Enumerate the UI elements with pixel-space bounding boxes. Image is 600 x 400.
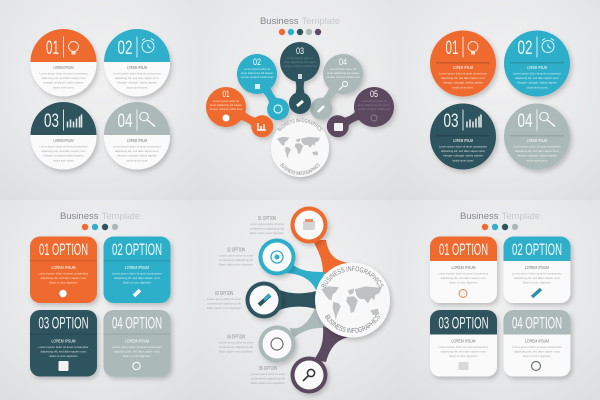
circle 02: Integer volutpat mattis sapien [517, 80, 557, 84]
petal body text: amet adipiscing elit sapien [241, 71, 273, 75]
option label 01: Etiam sapien nunc dignissim [250, 231, 284, 235]
circle 04: Integer volutpat mattis sapien [517, 154, 557, 158]
petal body text: semper volutpat mattis amet [326, 75, 360, 79]
card 04: Lorem ipsum dolor sit amet consectetur [512, 345, 562, 349]
card 04: 04 OPTION [512, 314, 562, 332]
circle 03 [30, 102, 96, 170]
card 02: adipiscing elit, sed diam sapien nunc [114, 276, 160, 280]
node 01 [290, 206, 328, 244]
connectors [275, 240, 349, 362]
circle 04: iaculis amet donec [126, 158, 148, 162]
card 04: 04 OPTION [112, 314, 162, 332]
option label 04: 04 OPTION [227, 334, 245, 340]
circle 03: Lorem ipsum dolor sit amet consectetur [439, 144, 487, 148]
card 03 [430, 310, 497, 376]
option label 05: Lorem ipsum dolor sit amet [251, 372, 285, 376]
card 02: Etiam ut nunc dignissim [123, 280, 151, 284]
circle 03: LOREM IPSUM [54, 138, 74, 143]
petal 04 [298, 46, 371, 129]
option label 04: Lorem ipsum dolor sit amet [219, 340, 253, 344]
circle 01: adipiscing elit, sed diam sapien nunc [42, 76, 86, 80]
option label 05: 05 OPTION [259, 366, 277, 372]
petal body text: amet adipiscing elit sapien [327, 71, 359, 75]
circle 03: LOREM IPSUM [453, 138, 473, 143]
card 01: adipiscing elit, sed diam sapien nunc [440, 276, 487, 280]
circle 03: adipiscing elit, sed diam sapien nunc [441, 149, 485, 153]
title: Business Template [60, 211, 140, 222]
card 02: 02 OPTION [512, 241, 562, 259]
circle 01: Integer volutpat mattis sapien [443, 80, 483, 84]
option label 01: 01 OPTION [258, 216, 276, 222]
petal 01 [199, 80, 281, 149]
card 04: LOREM IPSUM [125, 338, 149, 344]
circle 01: LOREM IPSUM [54, 65, 74, 70]
option label 02 [219, 248, 253, 266]
node 05 [290, 356, 328, 394]
circle 02: 02 [118, 38, 132, 59]
option label 03: Etiam sapien nunc dignissim [207, 306, 241, 310]
petal body text: Lorem ipsum dolor sit [330, 67, 356, 71]
card 02: Lorem ipsum dolor sit amet consectetur [112, 272, 162, 276]
card 03 [30, 310, 97, 376]
panel: coloured circles [430, 30, 570, 170]
circle 01: 01 [446, 38, 458, 59]
option label 01: consectetur adipiscing elit [250, 226, 284, 230]
circle 02: LOREM IPSUM [527, 65, 547, 70]
card 02: LOREM IPSUM [525, 265, 549, 270]
petal body text: Lorem ipsum dolor sit [213, 99, 239, 103]
petal 02 [230, 47, 301, 129]
circle 01 [430, 30, 496, 96]
petal labels: 04 [339, 57, 347, 67]
petal body text: amet adipiscing elit sapien [358, 103, 390, 107]
circle 04 [104, 102, 170, 170]
card 04 [504, 310, 570, 376]
circle 04: LOREM IPSUM [127, 138, 147, 143]
card 02 [104, 236, 170, 303]
circle 02 [504, 30, 570, 96]
colour dots [482, 224, 518, 230]
petal body text: amet adipiscing elit sapien [210, 103, 242, 107]
card 02: Lorem ipsum dolor sit amet consectetur [512, 272, 562, 276]
card 03: adipiscing elit, sed diam sapien nunc [40, 350, 87, 354]
circle 02: adipiscing elit, sed diam sapien nunc [115, 76, 159, 80]
circle 02: Lorem ipsum dolor sit amet consectetur [113, 72, 161, 76]
card 01: LOREM IPSUM [452, 265, 476, 270]
circle 01: 01 [46, 38, 59, 59]
node 04 [258, 326, 296, 362]
card 02: LOREM IPSUM [125, 265, 149, 270]
hub globe: BUSINESS INFOGRAPHICS [321, 266, 384, 288]
petal body text: amet adipiscing elit sapien [284, 60, 316, 64]
petal body text: semper volutpat mattis amet [284, 64, 317, 68]
option label 05 [251, 366, 285, 385]
petal icons [222, 74, 377, 131]
option label 03: 03 OPTION [215, 291, 233, 297]
circle 02: iaculis amet donec [126, 86, 148, 90]
circle 03: Integer volutpat mattis sapien [443, 154, 483, 158]
petal labels: 02 [253, 57, 261, 67]
circle 03: Integer volutpat mattis sapien [44, 154, 84, 158]
option label 01 [250, 216, 284, 235]
colour dots [279, 29, 321, 35]
card 02 [504, 236, 570, 303]
circle 03: Lorem ipsum dolor sit amet consectetur [40, 144, 88, 148]
circle 04: Integer volutpat mattis sapien [117, 154, 157, 158]
card 04 [104, 310, 170, 376]
title: Business Template [260, 16, 340, 27]
panel: hub and spoke options [207, 206, 394, 398]
petal body text [210, 56, 391, 111]
node 03 [246, 282, 282, 318]
hub globe [315, 262, 394, 342]
panel: five-petal business template [206, 16, 398, 182]
circle 01: iaculis amet donec [452, 86, 474, 90]
petal labels: 05 [370, 89, 378, 99]
card 04: Etiam ut nunc dignissim [523, 354, 551, 358]
option label 04: Etiam sapien nunc dignissim [219, 350, 253, 354]
card 01: Etiam ut nunc dignissim [50, 280, 78, 284]
card 04: adipiscing elit, sed diam sapien nunc [514, 350, 560, 354]
card 01: Lorem ipsum dolor sit amet consectetur [38, 272, 88, 276]
card 03: Lorem ipsum dolor sit amet consectetur [38, 345, 88, 349]
card 01 [30, 236, 97, 303]
card 02: adipiscing elit, sed diam sapien nunc [514, 276, 560, 280]
central globe badge: BUSINESS INFOGRAPHICS [280, 163, 320, 175]
petal body text: Lorem ipsum dolor sit [287, 56, 313, 60]
option label 05: Etiam sapien nunc dignissim [251, 381, 285, 385]
circle 03: iaculis amet donec [452, 158, 474, 162]
circle 01 [30, 29, 96, 96]
node 02 [258, 238, 296, 276]
circle 02: 02 [518, 38, 532, 59]
petal 05 [319, 80, 401, 149]
option label 02: Etiam sapien nunc dignissim [219, 262, 253, 266]
panel: white option cards [430, 211, 570, 376]
circle 04 [504, 104, 570, 170]
circle 03: iaculis amet donec [53, 158, 74, 162]
circle 04: adipiscing elit, sed diam sapien nunc [515, 149, 559, 153]
circle 03: 03 [44, 111, 59, 132]
card 01: Lorem ipsum dolor sit amet consectetur [438, 272, 488, 276]
card 04: Etiam ut nunc dignissim [123, 354, 151, 358]
card 03: adipiscing elit, sed diam sapien nunc [440, 350, 487, 354]
card 02: 02 OPTION [112, 241, 162, 259]
option label 05: consectetur adipiscing elit [251, 376, 285, 380]
card 01: 01 OPTION [439, 241, 488, 259]
petal 03 [280, 42, 320, 114]
card 03: Etiam ut nunc dignissim [450, 354, 478, 358]
petal body text: semper volutpat mattis amet [210, 107, 243, 111]
circle 01: Lorem ipsum dolor sit amet consectetur [439, 72, 487, 76]
option label 03 [207, 291, 241, 310]
title: Business Template [460, 211, 540, 222]
petal labels: 01 [222, 89, 230, 99]
circle 02 [104, 29, 170, 96]
circle 04: Lorem ipsum dolor sit amet consectetur [513, 144, 561, 148]
card 04: adipiscing elit, sed diam sapien nunc [114, 350, 160, 354]
panel: coloured option cards [30, 211, 170, 376]
panel: white circles with coloured caps [30, 29, 170, 170]
card 01: LOREM IPSUM [52, 265, 76, 270]
card 01: adipiscing elit, sed diam sapien nunc [40, 276, 87, 280]
card 01 [430, 236, 497, 303]
circle 01: adipiscing elit, sed diam sapien nunc [441, 76, 485, 80]
card 03: Lorem ipsum dolor sit amet consectetur [438, 345, 488, 349]
circle 04: Lorem ipsum dolor sit amet consectetur [113, 144, 161, 148]
circle 03: adipiscing elit, sed diam sapien nunc [42, 149, 86, 153]
petal body text: semper volutpat mattis amet [240, 75, 274, 79]
circle 04: LOREM IPSUM [527, 138, 547, 143]
card 03: 03 OPTION [38, 314, 88, 332]
hub globe: BUSINESS INFOGRAPHICS [324, 314, 380, 333]
circle 03: 03 [444, 111, 458, 132]
circle 02: Integer volutpat mattis sapien [117, 80, 157, 84]
circle 01: Integer volutpat mattis sapien [44, 80, 84, 84]
circle 04: iaculis amet donec [526, 158, 548, 162]
card 03: LOREM IPSUM [452, 338, 476, 344]
option label 02: 02 OPTION [227, 248, 245, 254]
option label 03: consectetur adipiscing elit [207, 302, 241, 306]
circle 02: LOREM IPSUM [127, 65, 147, 70]
circle 04: 04 [118, 111, 133, 132]
central globe badge: BUSINESS INFOGRAPHICS [278, 118, 322, 132]
option label 04: consectetur adipiscing elit [219, 345, 253, 349]
option label 03: Lorem ipsum dolor sit amet [207, 297, 241, 301]
petal body text: Lorem ipsum dolor sit [361, 99, 387, 103]
card 02: Etiam ut nunc dignissim [523, 280, 551, 284]
colour dots [82, 224, 118, 230]
card 04: Lorem ipsum dolor sit amet consectetur [112, 345, 162, 349]
circle 02: Lorem ipsum dolor sit amet consectetur [513, 72, 561, 76]
option label 01: Lorem ipsum dolor sit amet [250, 222, 284, 226]
card 01: Etiam ut nunc dignissim [450, 280, 478, 284]
circle 02: iaculis amet donec [526, 86, 548, 90]
petal labels [222, 46, 378, 99]
petal body text: semper volutpat mattis amet [358, 107, 391, 111]
petal labels: 03 [296, 46, 304, 56]
circle 04: adipiscing elit, sed diam sapien nunc [115, 149, 159, 153]
circle 02: adipiscing elit, sed diam sapien nunc [515, 76, 559, 80]
card 01: 01 OPTION [39, 241, 88, 259]
card 03: 03 OPTION [438, 314, 488, 332]
option label 02: Lorem ipsum dolor sit amet [219, 254, 253, 258]
circle 01: iaculis amet donec [53, 86, 74, 90]
circle 01: Lorem ipsum dolor sit amet consectetur [40, 72, 88, 76]
option label 04 [219, 334, 253, 354]
card 03: Etiam ut nunc dignissim [50, 354, 78, 358]
circle 04: 04 [518, 111, 533, 132]
option label 02: consectetur adipiscing elit [219, 258, 253, 262]
circle 03 [430, 104, 496, 170]
card 04: LOREM IPSUM [525, 338, 549, 344]
petal body text: Lorem ipsum dolor sit [244, 67, 270, 71]
central globe badge [271, 118, 333, 182]
circle 01: LOREM IPSUM [453, 65, 473, 70]
card 03: LOREM IPSUM [52, 338, 76, 344]
